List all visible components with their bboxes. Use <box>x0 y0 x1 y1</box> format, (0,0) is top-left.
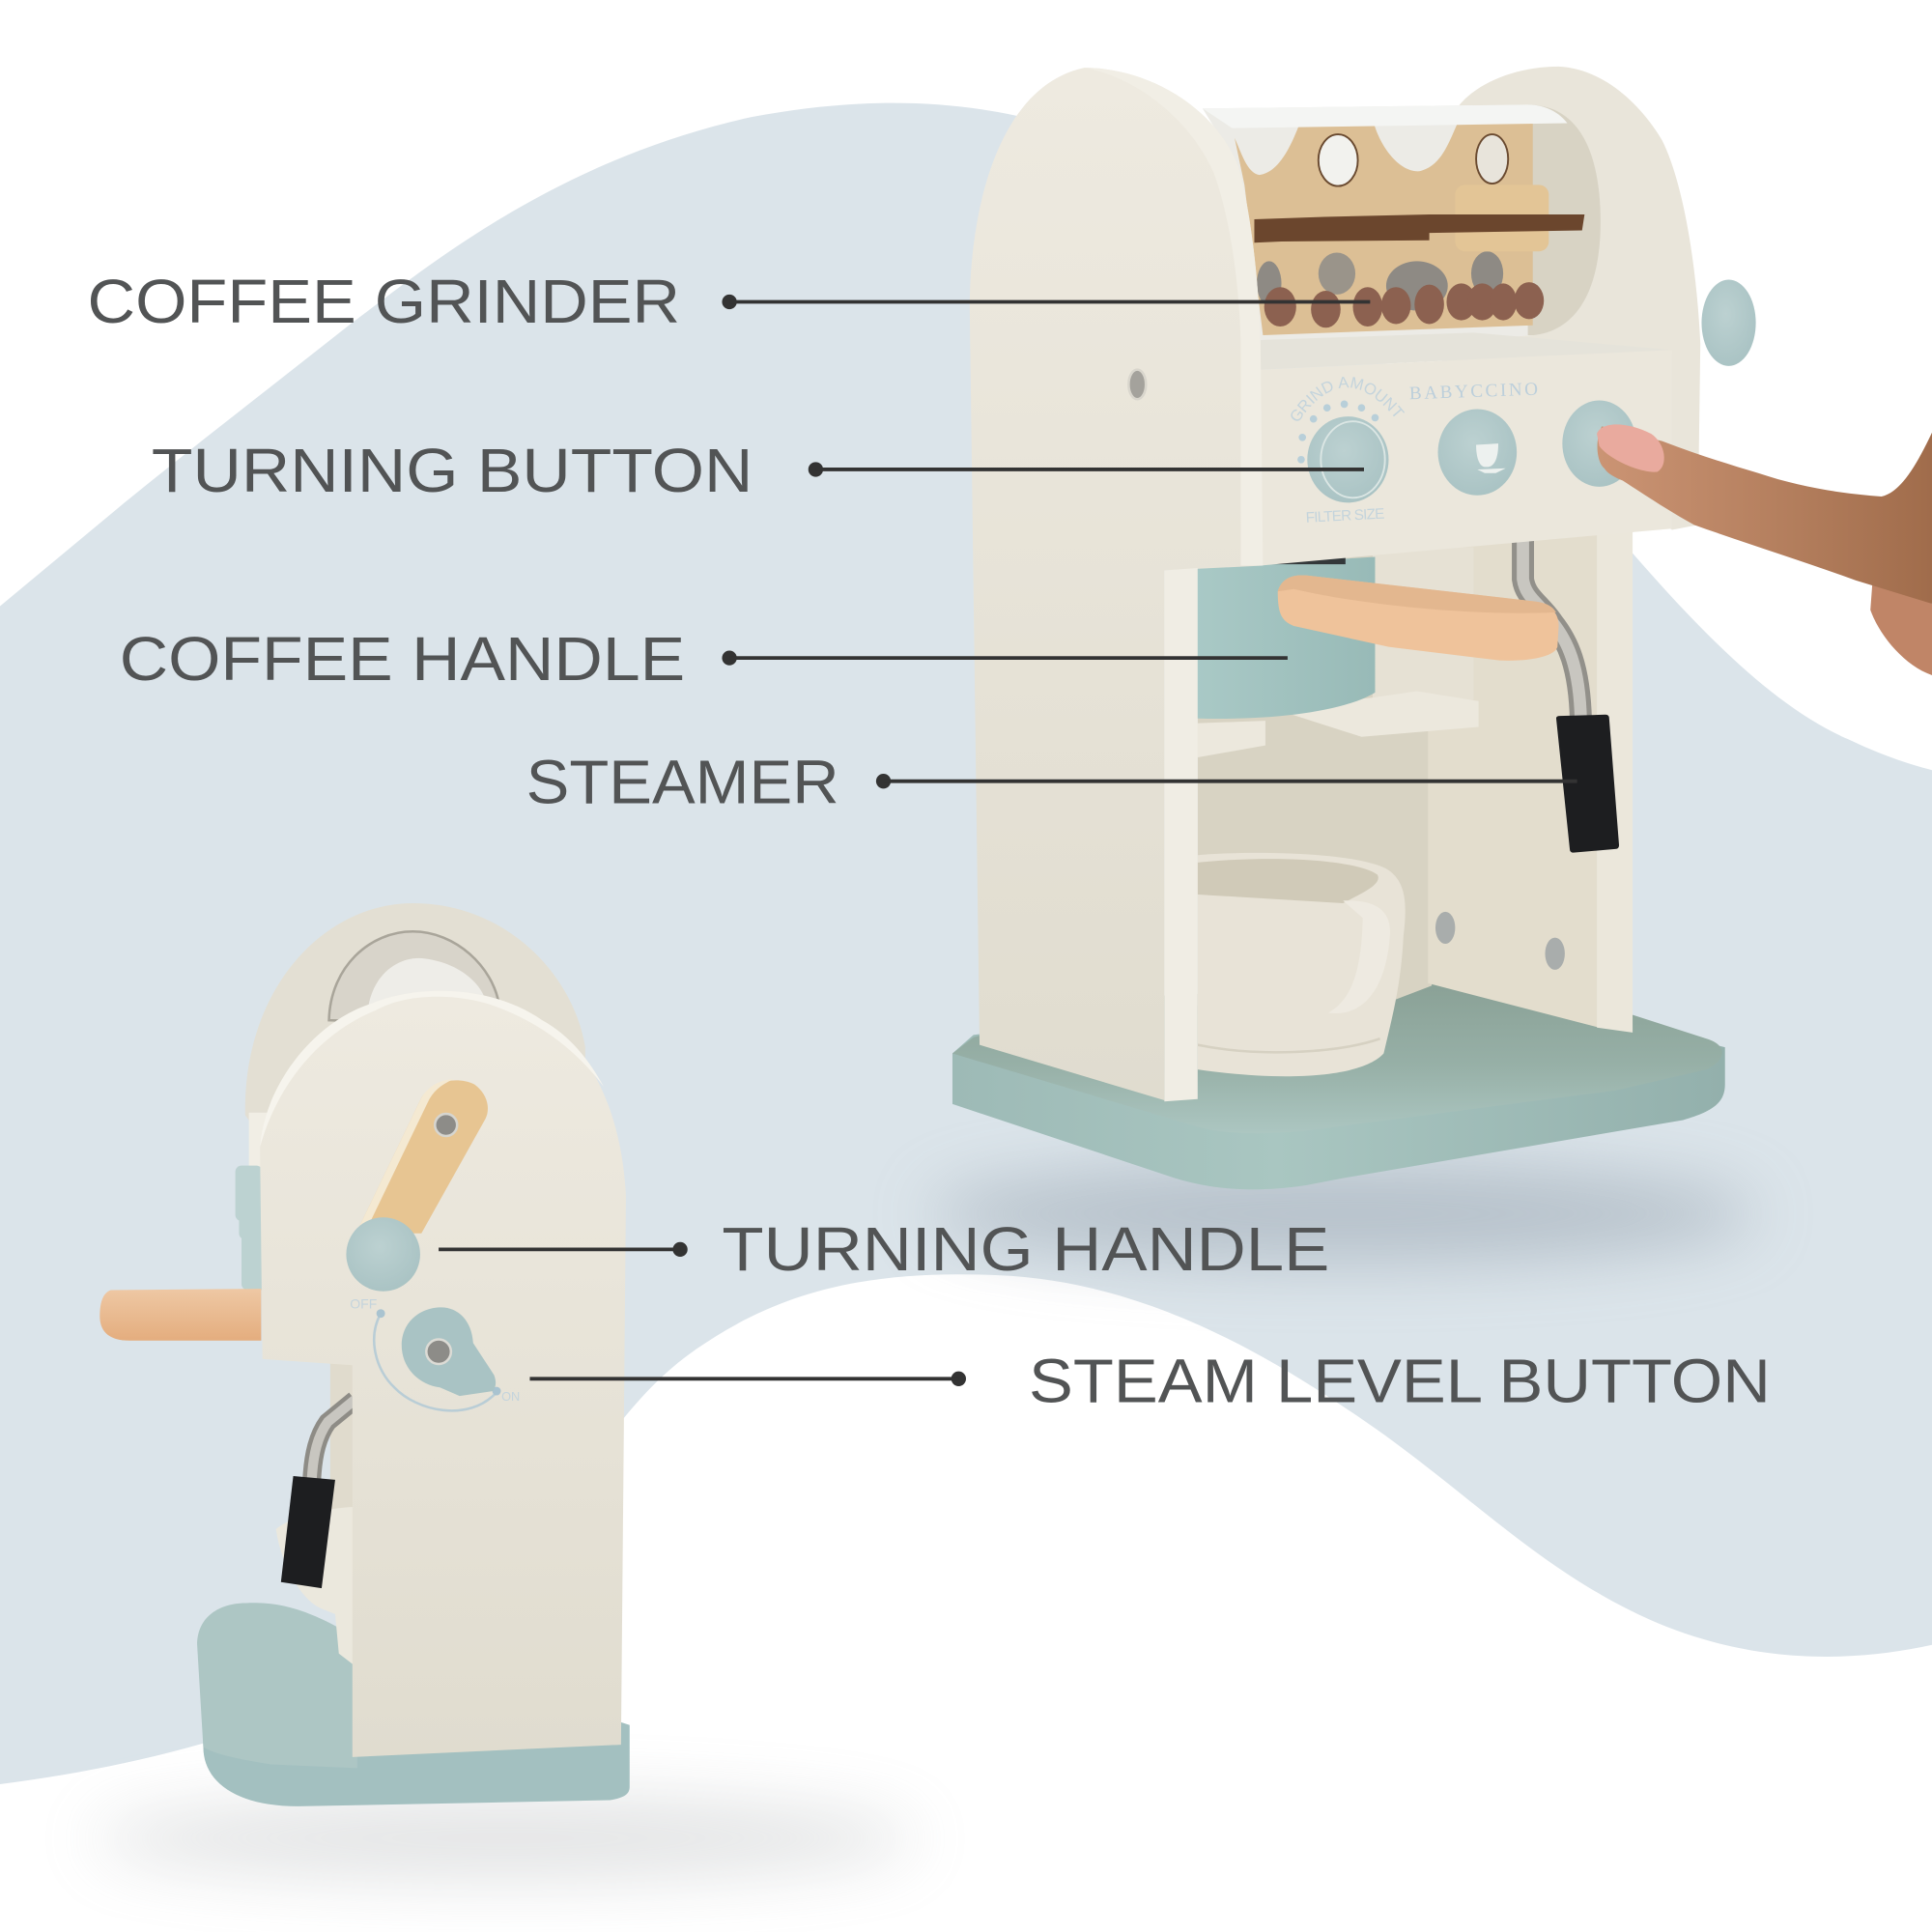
callout: turning handle <box>439 1214 1329 1284</box>
wooden grinder plate <box>1235 122 1533 335</box>
side view wooden handle <box>99 1289 261 1341</box>
coffee cup <box>1198 853 1406 1076</box>
left panel inner side <box>1164 568 1198 1101</box>
dark ring above handle cup <box>1257 555 1346 564</box>
front arch panel <box>260 991 626 1757</box>
callout: coffee grinder <box>88 267 1370 336</box>
inner rear wall <box>1198 542 1432 1006</box>
lever screw <box>426 1339 451 1364</box>
arm screw <box>435 1114 457 1136</box>
inner right wall <box>1428 529 1600 1028</box>
glass lower strip <box>1261 332 1672 370</box>
main coffee machine <box>952 66 1932 1190</box>
grind amount text: GRIND AMOUNT <box>1291 377 1405 421</box>
shadow: side machine <box>93 1797 918 1880</box>
callout: turning handle: TURNING HANDLE <box>722 1214 1329 1284</box>
coffee handle cup <box>1195 557 1375 719</box>
shadow: main machine <box>930 1164 1756 1263</box>
callout: steamer: STEAMER <box>526 748 839 817</box>
off label: OFF <box>350 1296 377 1312</box>
rear arch <box>245 903 585 1133</box>
callout: coffee handle <box>120 624 1288 694</box>
turning arm <box>356 1079 488 1234</box>
button: pressed <box>1562 401 1636 487</box>
on label: ON <box>501 1389 520 1404</box>
upper shelf <box>1273 692 1479 737</box>
inner column <box>330 1355 357 1516</box>
callout: steam level button: STEAM LEVEL BUTTON <box>1029 1347 1771 1416</box>
turning knob <box>346 1217 420 1292</box>
brand text: BABYCCINO <box>1409 380 1541 404</box>
filter size text: FILTER SIZE <box>1305 506 1385 526</box>
rear right arch <box>1441 67 1700 529</box>
grind dots <box>1297 401 1378 464</box>
grinder window <box>329 931 499 1023</box>
side view coffee machine <box>99 903 630 1806</box>
brown shelf <box>1254 214 1584 242</box>
plate holes <box>1319 134 1358 186</box>
back column <box>1373 547 1474 699</box>
coffee beans <box>1264 282 1544 327</box>
button: turning <box>1307 416 1389 502</box>
side screw <box>1128 370 1146 399</box>
steam level arc <box>374 1309 500 1410</box>
steamer black handle <box>1556 715 1619 853</box>
callout: coffee grinder: COFFEE GRINDER <box>88 267 680 336</box>
rear screws <box>1435 912 1565 970</box>
steam level lever <box>402 1307 496 1396</box>
callout: turning button <box>152 436 1364 505</box>
side view buttons <box>236 1166 271 1290</box>
glass top band <box>1203 104 1567 128</box>
steam tube <box>1523 540 1580 721</box>
side machine base <box>200 1627 630 1806</box>
wooden handle <box>1278 575 1559 661</box>
side view cup <box>276 1507 355 1665</box>
inner white drum <box>367 958 487 1016</box>
button: cup <box>1438 409 1517 496</box>
lower shelf <box>1195 721 1265 757</box>
side view steam tube <box>312 1400 355 1481</box>
callout: coffee handle: COFFEE HANDLE <box>120 624 685 694</box>
cup handle <box>1328 900 1390 1013</box>
grinder glass cylinder <box>1203 104 1601 357</box>
side view black handle <box>281 1476 335 1588</box>
machine base <box>952 974 1725 1189</box>
callout: steam level button <box>529 1347 1771 1416</box>
right front post <box>1597 529 1633 1033</box>
side knob <box>1701 280 1756 366</box>
fingernail <box>1597 424 1664 472</box>
callout: turning button: TURNING BUTTON <box>152 436 753 505</box>
base top surface <box>197 1603 357 1768</box>
front left panel <box>970 68 1263 1100</box>
hand with pressing finger <box>1597 424 1932 675</box>
front arch highlight <box>260 991 604 1148</box>
rear white block <box>249 1113 271 1179</box>
control panel <box>1261 350 1672 565</box>
callout: steamer <box>526 748 1577 817</box>
left panel edge <box>1084 68 1263 565</box>
wooden cylinder <box>1455 185 1548 251</box>
